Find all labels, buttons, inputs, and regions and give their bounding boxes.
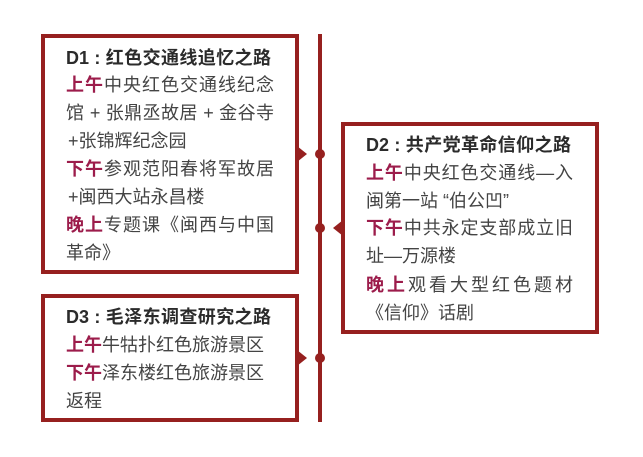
text: D1 morning line 2: 馆 + 张鼎丞故居 + 金谷寺 (66, 103, 274, 123)
text: D2 evening line 2: 《信仰》话剧 (366, 303, 474, 323)
heading: D3: D3 : 毛泽东调查研究之路 (66, 307, 271, 327)
panel: D3 (41, 294, 299, 422)
timeline dot: D2 (315, 223, 325, 233)
pointer: D3 (297, 350, 307, 366)
text: D3 morning: 上午牛牯扑红色旅游景区 (66, 335, 264, 355)
text: D1 evening line 2: 革命》 (66, 243, 120, 263)
timeline dot: D3 (315, 353, 325, 363)
heading: D1: D1 : 红色交通线追忆之路 (66, 48, 271, 68)
text: D2 afternoon line 2: 址—万源楼 (366, 246, 456, 266)
text: D3 afternoon: 下午泽东楼红色旅游景区 (66, 363, 264, 383)
text: D1 afternoon: 下午参观范阳春将军故居 (66, 159, 274, 179)
text: D1 evening: 晚上专题课《闽西与中国 (66, 215, 274, 235)
text: D1 afternoon line 2: +闽西大站永昌楼 (68, 187, 205, 207)
panel: D2 (341, 122, 599, 334)
text: D1 morning: 上午中央红色交通线纪念 (66, 75, 274, 95)
text: D2 morning: 上午中央红色交通线—入 (366, 163, 573, 183)
text: D3 return: 返程 (66, 391, 102, 411)
text: D2 morning line 2: 闽第一站 “伯公凹” (366, 191, 509, 211)
timeline axis (318, 34, 322, 422)
pointer: D1 (297, 146, 307, 162)
heading: D2: D2 : 共产党革命信仰之路 (366, 135, 571, 155)
text: D2 afternoon: 下午中共永定支部成立旧 (366, 218, 573, 238)
timeline dot: D1 (315, 149, 325, 159)
pointer: D2 (333, 220, 343, 236)
text: D2 evening: 晚上观看大型红色题材 (366, 275, 573, 295)
panel: D1 (41, 34, 299, 274)
text: D1 morning line 3: +张锦辉纪念园 (68, 131, 187, 151)
